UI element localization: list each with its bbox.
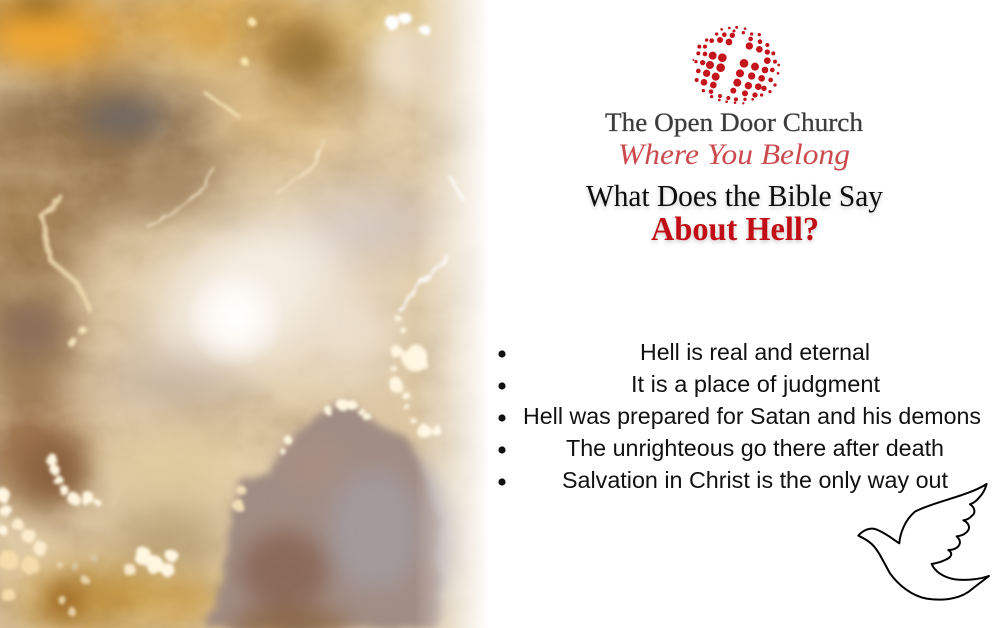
storm top edge [336,398,348,410]
bullet 2: It is a place of judgment [631,371,881,397]
soft light centre [128,196,362,402]
bullet 1 [498,339,870,365]
bullet 4: The unrighteous go there after death [566,435,944,461]
bullet 3: Hell was prepared for Satan and his demons [523,403,981,429]
left lit cloud [46,454,58,466]
right lit cloud [395,315,401,321]
logo text: church name: The Open Door Church [605,108,863,137]
lit cloud puffs [0,12,441,616]
bullet list [498,339,981,493]
bullet 5: Salvation in Christ is the only way out [562,467,949,493]
icon: dove outline [858,484,989,600]
logo: dotted globe with cross [693,26,780,104]
bullet 1: Hell is real and eternal [640,339,870,365]
logo text: tagline: Where You Belong [618,138,850,171]
bullet 2 [498,371,881,397]
sun glow [184,225,316,348]
bottom puffs [134,547,152,565]
dark storm cloud [401,450,456,628]
upper wisps [241,58,249,66]
white fade toward right [415,0,490,628]
heading line 2: About Hell? [651,211,819,248]
heading line 1: What Does the Bible Say [586,178,883,213]
cloud texture [0,0,500,628]
photo: golden sky with clouds [0,0,500,628]
